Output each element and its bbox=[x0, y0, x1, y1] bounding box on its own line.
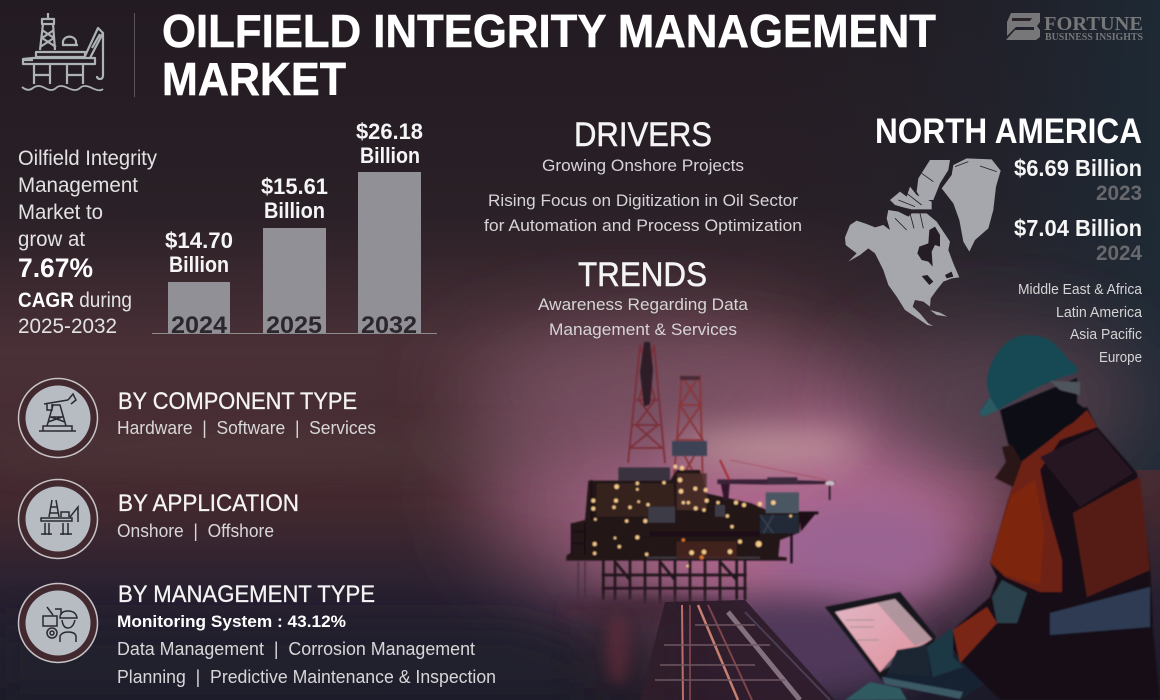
bar chart: Billion bbox=[264, 198, 325, 223]
segment: management type: Planning | Predictive Maintenance & Inspection bbox=[117, 666, 496, 687]
pipeline deck foreground bbox=[560, 596, 835, 700]
bar chart: 2025 bbox=[266, 312, 322, 339]
jacket panels bbox=[990, 410, 1097, 592]
worker with laptop bbox=[825, 335, 1160, 700]
title bbox=[162, 5, 936, 105]
text block: CAGR: Management bbox=[18, 174, 138, 197]
regions list: Middle East & Africa bbox=[1018, 282, 1143, 298]
text block: CAGR: CAGR during bbox=[18, 289, 132, 312]
drivers: DRIVERS bbox=[574, 116, 712, 154]
hard hat bbox=[979, 335, 1078, 417]
drivers: for Automation and Process Optimization bbox=[484, 216, 802, 235]
rig lights bbox=[591, 465, 792, 567]
bar chart: $15.61 bbox=[261, 174, 328, 199]
trends bbox=[538, 256, 749, 339]
segment: component type: BY COMPONENT TYPE bbox=[118, 388, 357, 415]
North America stats: 2024 bbox=[1096, 242, 1142, 265]
trends: Awareness Regarding Data bbox=[538, 295, 749, 314]
trends: Management & Services bbox=[549, 320, 737, 339]
deck silhouette bbox=[618, 467, 670, 481]
drivers bbox=[484, 116, 802, 235]
segment: management type bbox=[18, 581, 496, 687]
header divider bbox=[134, 13, 136, 97]
neck and face bbox=[1000, 378, 1087, 463]
bar chart: $14.70 bbox=[165, 228, 233, 253]
icon: pumpjack bbox=[18, 378, 98, 458]
regions list: Asia Pacific bbox=[1070, 327, 1142, 343]
logo: Fortune Business Insights: FORTUNE bbox=[1044, 13, 1143, 35]
bar chart: Billion bbox=[169, 252, 229, 277]
bar chart bbox=[152, 119, 437, 339]
text block: CAGR: 7.67% bbox=[18, 253, 93, 283]
segment: application bbox=[18, 480, 299, 558]
right module bbox=[766, 492, 799, 513]
icon: engineer and gear bbox=[18, 584, 98, 662]
bar chart: Billion bbox=[360, 143, 420, 168]
text block: CAGR: 2025-2032 bbox=[18, 315, 117, 338]
laptop bbox=[825, 592, 997, 700]
icon: offshore rig bbox=[18, 480, 98, 558]
logo: Fortune Business Insights bbox=[1006, 13, 1143, 43]
North America stats bbox=[875, 112, 1142, 265]
segment: management type: BY MANAGEMENT TYPE bbox=[118, 581, 375, 608]
legs bbox=[602, 560, 747, 603]
text block: CAGR: Market to bbox=[18, 201, 103, 224]
segment: component type: Hardware | Software | Services bbox=[117, 417, 376, 438]
oil rig platform bbox=[566, 342, 835, 603]
segment: management type: Data Management | Corrosion Management bbox=[117, 638, 475, 659]
map: North America bbox=[845, 158, 1001, 326]
regions list bbox=[1018, 282, 1143, 366]
icon: offshore rig logo bbox=[22, 13, 103, 90]
segment: component type bbox=[18, 378, 376, 458]
regions list: Europe bbox=[1099, 350, 1142, 366]
segment: application: Onshore | Offshore bbox=[117, 520, 274, 541]
bar chart: $26.18 bbox=[356, 119, 423, 144]
text block: CAGR: Oilfield Integrity bbox=[18, 147, 157, 170]
title: MARKET bbox=[162, 53, 346, 105]
bar chart: 2032 bbox=[361, 312, 417, 339]
drivers: Rising Focus on Digitization in Oil Sector bbox=[488, 191, 798, 210]
crane bbox=[720, 480, 730, 500]
text block: CAGR: grow at bbox=[18, 228, 85, 251]
text block: CAGR bbox=[18, 147, 157, 338]
North America stats: 2023 bbox=[1096, 182, 1142, 205]
North America stats: $6.69 Billion bbox=[1014, 155, 1142, 181]
segment: application: BY APPLICATION bbox=[118, 490, 299, 517]
regions list: Latin America bbox=[1056, 305, 1143, 321]
derricks bbox=[628, 345, 703, 490]
sleeve and glove bbox=[927, 627, 963, 677]
segment: management type: Monitoring System : 43.12% bbox=[117, 612, 346, 631]
title: OILFIELD INTEGRITY MANAGEMENT bbox=[162, 5, 936, 57]
logo: Fortune Business Insights: BUSINESS INSIGHTS bbox=[1045, 32, 1143, 43]
header bbox=[22, 5, 1143, 105]
trends: TRENDS bbox=[578, 256, 707, 294]
body bbox=[953, 407, 1160, 700]
North America stats: $7.04 Billion bbox=[1014, 215, 1142, 241]
bar chart: 2024 bbox=[171, 312, 228, 339]
drivers: Growing Onshore Projects bbox=[542, 156, 744, 175]
